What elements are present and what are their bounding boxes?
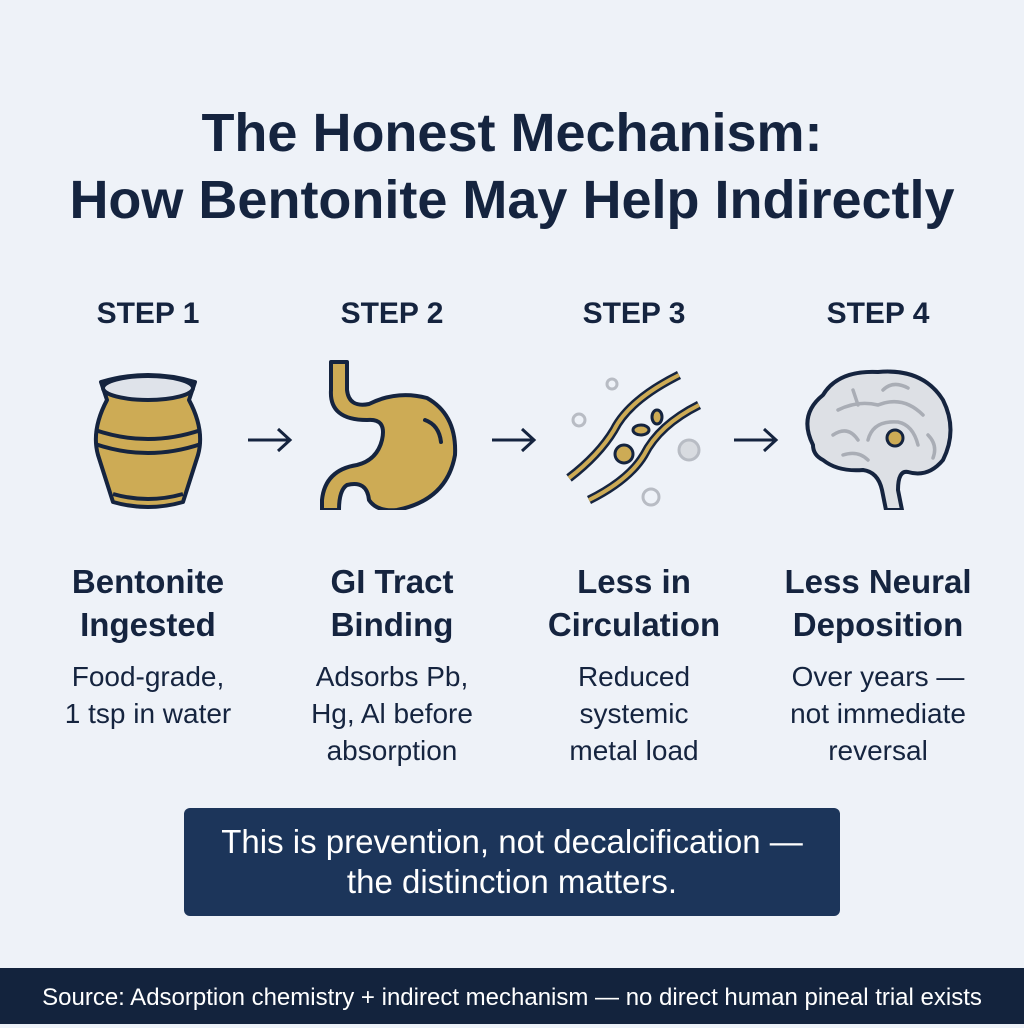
step 3 label: STEP 3 xyxy=(583,297,685,330)
arrow 1 xyxy=(248,428,292,452)
step 2 heading: Binding xyxy=(331,606,453,643)
step 1 label: STEP 1 xyxy=(97,297,199,330)
step 1 heading: Ingested xyxy=(80,606,216,643)
arrow 3 xyxy=(734,428,778,452)
step 4 description: not immediate xyxy=(790,698,966,729)
step 1 column xyxy=(65,297,231,729)
step 2 label: STEP 2 xyxy=(341,297,443,330)
callout box: This is prevention, not decalcification — xyxy=(221,823,803,860)
step 2 heading: GI Tract xyxy=(331,563,453,600)
icon: clay pot xyxy=(94,373,202,509)
step 4 description: Over years — xyxy=(792,661,964,692)
footer source xyxy=(0,968,1024,1024)
step 3 description: Reduced xyxy=(578,661,690,692)
step 4 description xyxy=(790,661,966,766)
step 4 heading: Deposition xyxy=(793,606,963,643)
step 1 description xyxy=(65,661,231,729)
step 1 description: 1 tsp in water xyxy=(65,698,231,729)
icon: blood vessel xyxy=(566,371,701,506)
icon: brain xyxy=(805,370,952,510)
step 1 description: Food-grade, xyxy=(72,661,224,692)
step 3 column xyxy=(548,297,720,766)
callout box: the distinction matters. xyxy=(347,863,677,900)
step 1 heading xyxy=(72,563,224,643)
step 3 heading: Circulation xyxy=(548,606,720,643)
step 2 heading xyxy=(331,563,454,643)
step 2 description xyxy=(311,661,473,766)
step 4 description: reversal xyxy=(828,735,928,766)
title: How Bentonite May Help Indirectly xyxy=(69,170,955,230)
arrow 2 xyxy=(492,428,536,452)
step 3 description: metal load xyxy=(569,735,699,766)
title xyxy=(69,103,955,230)
icon: stomach xyxy=(320,360,458,510)
step 4 column xyxy=(784,297,972,766)
step 3 heading: Less in xyxy=(577,563,691,600)
step 3 description xyxy=(569,661,699,766)
step 2 description: Adsorbs Pb, xyxy=(316,661,468,692)
step 2 description: Hg, Al before xyxy=(311,698,473,729)
step 3 heading xyxy=(548,563,720,643)
step 3 description: systemic xyxy=(580,698,688,729)
step 4 heading: Less Neural xyxy=(784,563,972,600)
callout box xyxy=(184,808,840,916)
step 1 heading: Bentonite xyxy=(72,563,224,600)
title: The Honest Mechanism: xyxy=(201,103,823,163)
step 2 description: absorption xyxy=(327,735,457,766)
step 2 column xyxy=(311,297,473,766)
step 4 label: STEP 4 xyxy=(827,297,929,330)
step 4 heading xyxy=(784,563,972,643)
footer source: Source: Adsorption chemistry + indirect mechanism — no direct human pineal trial exists xyxy=(42,984,982,1011)
